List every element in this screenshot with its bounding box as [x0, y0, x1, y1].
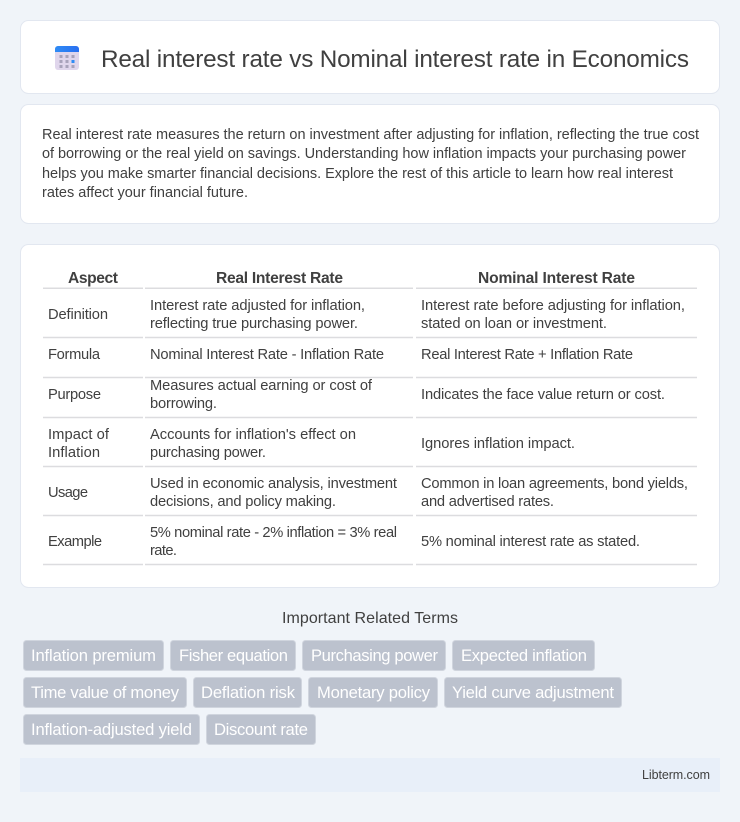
chip: Monetary policy: Monetary policy: [317, 683, 431, 702]
table row: formula: Nominal Interest Rate - Inflation Rate: [150, 347, 384, 363]
heading: related terms: Important Related Terms: [282, 610, 458, 627]
table row: definition: [48, 298, 685, 332]
text block: introduction paragraph: rates affect your financial future.: [42, 185, 248, 201]
panel: comparison table: [20, 244, 720, 588]
table row: impact of inflation: Impact of: [48, 427, 110, 443]
text block: introduction paragraph: of borrowing or the real yield on savings. Understanding how inflation impacts your purchasing power: [42, 146, 686, 162]
chip: Expected inflation: [452, 640, 594, 670]
text block: introduction paragraph: [42, 127, 699, 201]
table row: example: Example: [48, 534, 102, 550]
table row: purpose: Measures actual earning or cost of: [150, 378, 373, 394]
related term chips: [24, 640, 622, 744]
chip: Expected inflation: Expected inflation: [461, 646, 587, 665]
text block: introduction paragraph: Real interest rate measures the return on investment after adjusting for inflation, reflecting the true cost: [42, 127, 699, 143]
table row: example: 5% nominal rate - 2% inflation = 3% real: [150, 525, 397, 541]
chip: Deflation risk: [194, 678, 302, 708]
table row: impact of inflation: Inflation: [48, 445, 100, 461]
table row: formula: Formula: [48, 347, 101, 363]
table header row: [68, 270, 635, 287]
table row: usage: [48, 476, 688, 510]
table row: definition: stated on loan or investment.: [421, 316, 607, 332]
chip: Purchasing power: [302, 640, 446, 670]
table row: formula: Real Interest Rate + Inflation Rate: [421, 347, 633, 363]
table row: usage: decisions, and policy making.: [150, 494, 336, 510]
table row: definition: Definition: [48, 307, 108, 323]
chip: Discount rate: [206, 714, 316, 744]
table row: definition: reflecting true purchasing power.: [150, 316, 358, 332]
chip: Monetary policy: [308, 678, 438, 708]
table row: example: rate.: [150, 543, 177, 559]
chip: Purchasing power: Purchasing power: [311, 646, 438, 665]
footer bar: [20, 758, 720, 792]
table row: usage: Usage: [48, 485, 88, 501]
chip: Deflation risk: Deflation risk: [201, 683, 296, 702]
table header row: Aspect: [68, 270, 118, 287]
table header row: Real Interest Rate: [216, 270, 343, 287]
table row: purpose: [48, 378, 665, 412]
chip: Discount rate: Discount rate: [214, 720, 308, 739]
table row: example: [48, 525, 640, 559]
table row: impact of inflation: Accounts for inflation's effect on: [150, 427, 356, 443]
table row: usage: and advertised rates.: [421, 494, 554, 510]
table row: definition: Interest rate before adjusting for inflation,: [421, 298, 685, 314]
chip: Inflation premium: Inflation premium: [31, 646, 156, 665]
table row: purpose: Purpose: [48, 387, 101, 403]
title: Real interest rate vs Nominal interest rate in Economics: [101, 46, 689, 73]
chip: Time value of money: [24, 678, 186, 708]
table row: impact of inflation: [48, 427, 575, 461]
icon: calendar: [55, 46, 79, 70]
text block: introduction paragraph: helps you make smarter financial decisions. Explore the rest of this article to learn how real interest: [42, 166, 673, 182]
table row: impact of inflation: Ignores inflation impact.: [421, 436, 575, 452]
chip: Yield curve adjustment: [444, 678, 622, 708]
footer text: Libterm.com: [642, 768, 710, 782]
table row: definition: Interest rate adjusted for inflation,: [150, 298, 365, 314]
chip: Fisher equation: [170, 640, 296, 670]
chip: Fisher equation: Fisher equation: [179, 646, 288, 665]
chip: Inflation-adjusted yield: [24, 714, 200, 744]
table row: example: 5% nominal interest rate as stated.: [421, 534, 640, 550]
table row: purpose: Indicates the face value return or cost.: [421, 387, 665, 403]
table row: formula: [48, 347, 633, 363]
chip: Yield curve adjustment: Yield curve adjustment: [452, 683, 614, 702]
table header row: Nominal Interest Rate: [478, 270, 635, 287]
chip: Inflation premium: [24, 640, 164, 670]
table row: usage: Used in economic analysis, investment: [150, 476, 397, 492]
chip: Time value of money: Time value of money: [31, 683, 180, 702]
table row: purpose: borrowing.: [150, 396, 217, 412]
panel: title card: [20, 20, 720, 94]
panel: introduction: [20, 104, 720, 224]
table row: impact of inflation: purchasing power.: [150, 445, 266, 461]
chip: Inflation-adjusted yield: Inflation-adjusted yield: [31, 720, 192, 739]
table row: usage: Common in loan agreements, bond yields,: [421, 476, 688, 492]
